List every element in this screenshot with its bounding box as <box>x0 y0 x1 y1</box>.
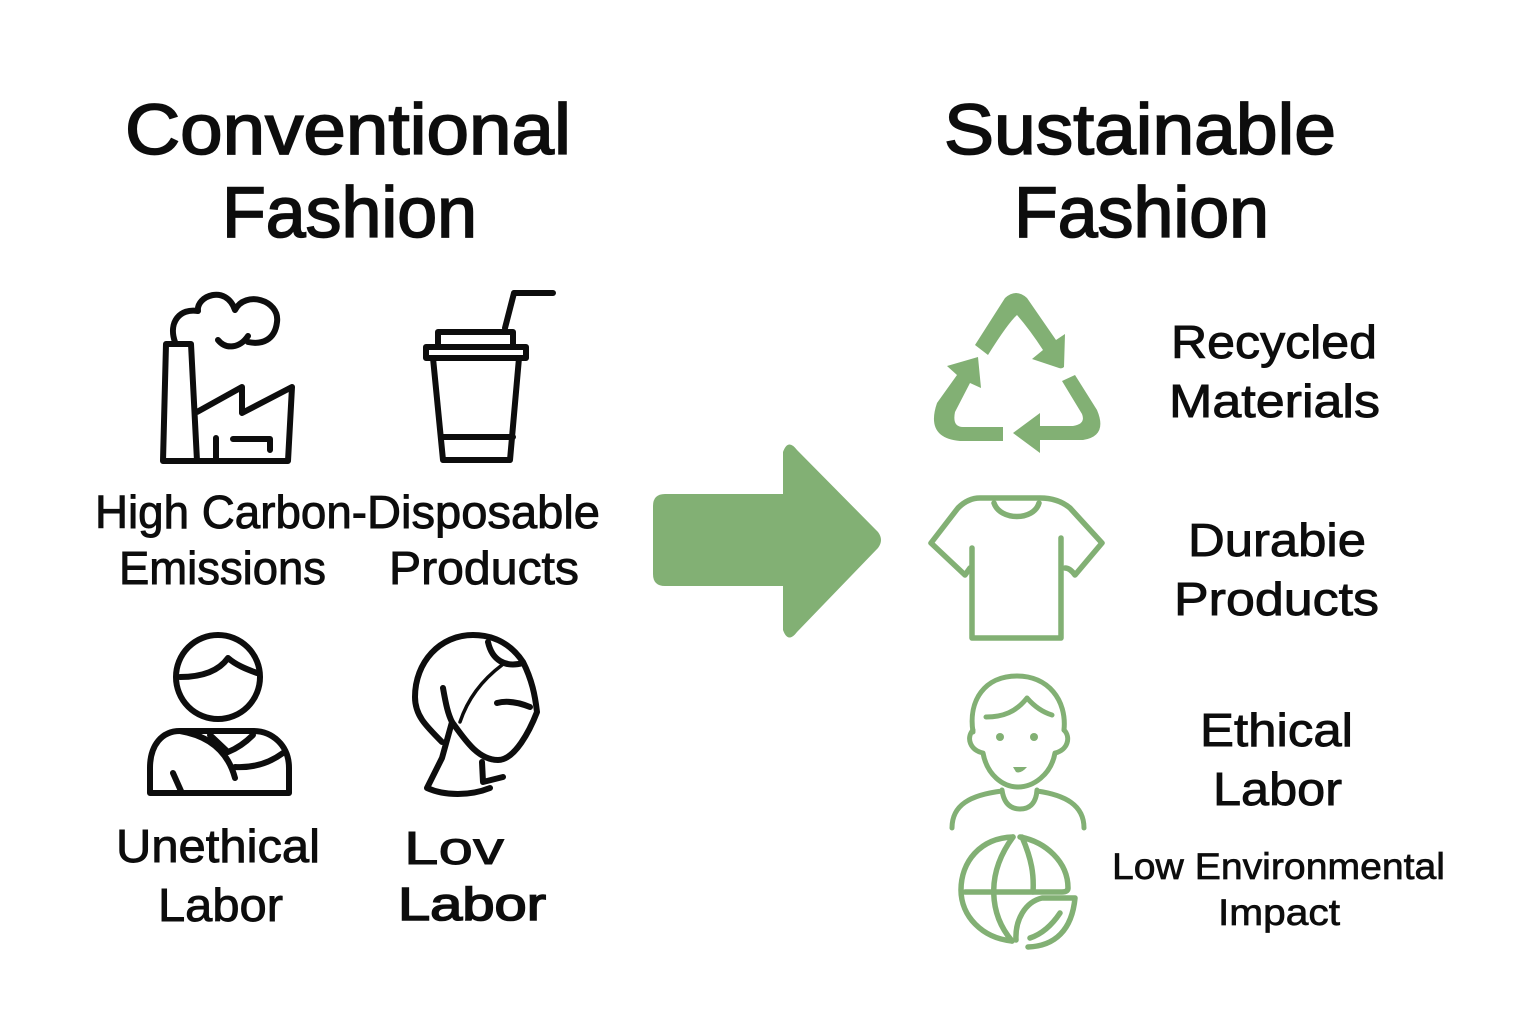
label: Durable Products: Products <box>1174 573 1379 625</box>
label: Low Labor: Labor <box>398 878 546 930</box>
heading: Conventional Fashion: Fashion <box>222 174 477 253</box>
heading: Conventional Fashion: Conventional <box>125 91 571 170</box>
label: Recycled Materials: Materials <box>1169 375 1380 427</box>
label: Disposable Products <box>367 486 600 594</box>
label: Low Environmental Impact: Low Environmental <box>1112 846 1445 887</box>
icon: person <box>952 676 1084 828</box>
label: High Carbon-Emissions: Emissions <box>119 542 326 594</box>
icon: head with mask <box>415 635 537 794</box>
icon: recycle symbol <box>934 293 1100 453</box>
heading: Sustainable Fashion: Sustainable <box>944 91 1336 170</box>
arrow <box>653 444 881 638</box>
label: High Carbon-Emissions <box>95 486 367 594</box>
label: Low Labor: Lov <box>404 822 505 874</box>
label: Low Environmental Impact: Impact <box>1218 892 1341 933</box>
label: Durable Products <box>1174 514 1379 625</box>
icon: worker <box>150 635 289 793</box>
label: Recycled Materials <box>1169 316 1380 427</box>
heading: Sustainable Fashion: Fashion <box>1014 174 1269 253</box>
label: Unethical Labor <box>116 820 320 931</box>
label: Ethical Labor: Labor <box>1213 763 1342 815</box>
label: Unethical Labor: Unethical <box>116 820 320 872</box>
icon: globe with leaf <box>961 837 1075 947</box>
label: Disposable Products: Products <box>389 542 579 594</box>
heading: Sustainable Fashion <box>944 91 1336 253</box>
heading: Conventional Fashion <box>125 91 571 253</box>
label: Disposable Products: Disposable <box>367 486 600 538</box>
label: Unethical Labor: Labor <box>158 879 283 931</box>
label: Recycled Materials: Recycled <box>1171 316 1377 368</box>
label: High Carbon-Emissions: High Carbon- <box>95 486 367 538</box>
label: Ethical Labor: Ethical <box>1200 704 1353 756</box>
label: Ethical Labor <box>1200 704 1353 815</box>
icon: factory with smoke <box>163 295 292 461</box>
label: Low Labor <box>398 822 546 930</box>
label: Low Environmental Impact <box>1112 846 1445 933</box>
label: Durable Products: Durabie <box>1188 514 1366 566</box>
icon: disposable cup with straw <box>426 293 553 460</box>
icon: t-shirt <box>931 498 1102 638</box>
